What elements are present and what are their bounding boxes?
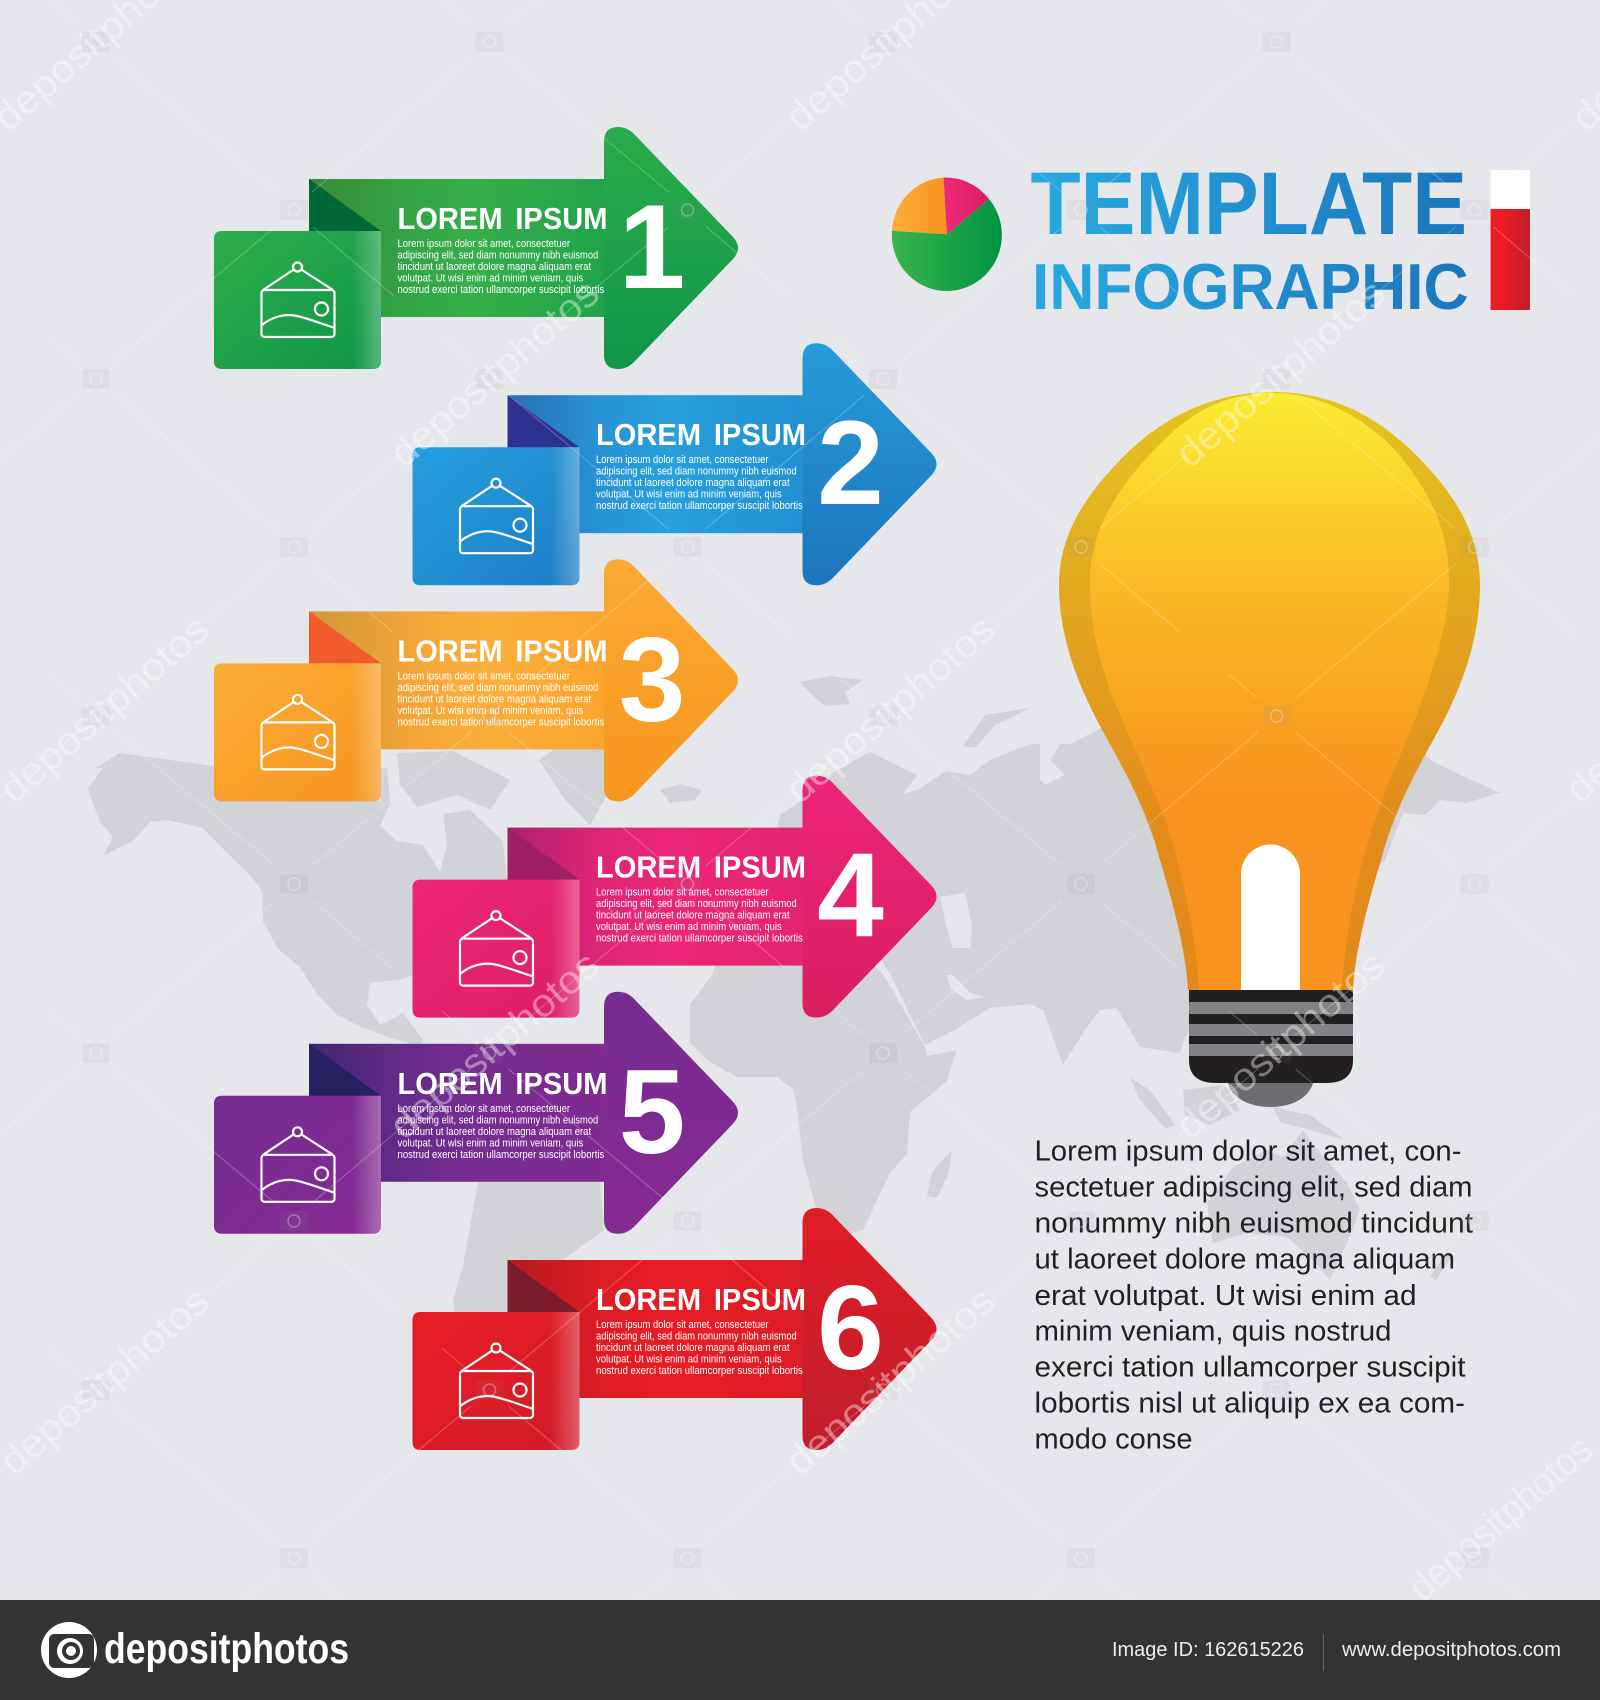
fold [309, 179, 381, 231]
body text: nostrud exerci tation ullamcorper suscipit lobortis [398, 716, 605, 728]
screw cap tip [1227, 1080, 1314, 1107]
fold [508, 1260, 580, 1312]
fold [508, 828, 580, 880]
heading: LOREM IPSUM [596, 850, 806, 885]
icon: hanging picture [262, 1127, 335, 1202]
body text: tincidunt ut laoreet dolore magna aliquam erat [596, 1342, 790, 1354]
icon: hanging picture [460, 911, 534, 986]
body text: adipiscing elit, sed diam nonummy nibh euismod [596, 466, 797, 478]
arrow body [309, 1044, 605, 1182]
map: iceland [660, 784, 702, 803]
arrow head [802, 1208, 936, 1450]
arrow head [802, 776, 936, 1018]
body text [596, 887, 803, 945]
map: arctic islands [397, 751, 510, 810]
arrow head [604, 127, 738, 369]
light bulb [1059, 392, 1480, 1107]
paragraph: minim veniam, quis nostrud [1034, 1316, 1392, 1348]
body text: Lorem ipsum dolor sit amet, consectetuer [596, 1319, 769, 1331]
screw stripes [1189, 1002, 1353, 1056]
number: 5 [619, 1045, 685, 1179]
heading: LOREM IPSUM [398, 201, 608, 236]
body text: Lorem ipsum dolor sit amet, consectetuer [596, 454, 769, 466]
body text [398, 670, 605, 728]
paragraph: sectetuer adipiscing elit, sed diam [1034, 1172, 1472, 1204]
arrow head [604, 559, 738, 801]
paragraph: lobortis nisl ut aliquip ex ea com- [1034, 1388, 1465, 1420]
watermark text: depositphotos [778, 1279, 1004, 1484]
icon: hanging picture [460, 1344, 534, 1418]
paragraph: Lorem ipsum dolor sit amet, con- [1034, 1136, 1462, 1168]
body text: tincidunt ut laoreet dolore magna aliquam erat [398, 1126, 591, 1138]
arrow 4 pink [412, 776, 936, 1018]
fold [309, 611, 381, 663]
arrow head [604, 992, 738, 1234]
body text [596, 1319, 803, 1377]
body text [596, 454, 803, 512]
body text [398, 1103, 605, 1161]
body text: adipiscing elit, sed diam nonummy nibh euismod [596, 1330, 797, 1342]
heading: LOREM IPSUM [398, 1066, 608, 1101]
fold [508, 395, 580, 447]
body text: tincidunt ut laoreet dolore magna aliquam erat [596, 910, 790, 922]
watermark text: depositphotos [382, 943, 608, 1148]
footer bar [0, 1600, 1600, 1700]
heading: LOREM IPSUM [398, 633, 608, 668]
map: novaya zemlya [963, 708, 1030, 748]
paragraph: ut laoreet dolore magna aliquam [1034, 1244, 1455, 1276]
body text: nostrud exerci tation ullamcorper suscipit lobortis [596, 1365, 803, 1377]
title line 1: TEMPLATE [1030, 153, 1467, 253]
image id: Image ID: 162615226 [1112, 1639, 1304, 1661]
title bar: white and red [1490, 170, 1530, 310]
map: eurasia [777, 700, 1507, 1065]
watermark text: depositphotos [778, 607, 1004, 812]
number: 1 [619, 180, 685, 314]
icon square [412, 880, 580, 1018]
footer divider [1323, 1634, 1324, 1671]
body text: Lorem ipsum dolor sit amet, consectetuer [398, 238, 570, 250]
arrow body [309, 611, 605, 749]
icon square [412, 1312, 580, 1450]
body text: volutpat. Ut wisi enim ad minim veniam, quis [398, 272, 584, 284]
heading: LOREM IPSUM [596, 1282, 806, 1317]
bulb inner glass [1090, 393, 1449, 990]
pie chart [892, 178, 1002, 291]
body text: nostrud exerci tation ullamcorper suscipit lobortis [596, 500, 803, 512]
map: south america [453, 1182, 604, 1320]
paragraph: nonummy nibh euismod tincidunt [1034, 1208, 1473, 1240]
watermark text: depositphotos [1168, 943, 1394, 1148]
body text: nostrud exerci tation ullamcorper suscipit lobortis [398, 284, 605, 296]
pie slice: green [892, 199, 1002, 291]
heading: LOREM IPSUM [596, 417, 806, 452]
number: 4 [817, 829, 884, 963]
body text: adipiscing elit, sed diam nonummy nibh euismod [398, 250, 598, 262]
body text: Lorem ipsum dolor sit amet, consectetuer [398, 1103, 570, 1115]
fold [309, 1044, 381, 1096]
pie slice: pink [944, 178, 989, 234]
sea: caspian [940, 893, 972, 948]
map: australia [1207, 1130, 1360, 1280]
icon square [214, 231, 381, 369]
bulb outer glass [1059, 392, 1480, 990]
arrow body [309, 179, 605, 317]
arrow body [508, 1260, 804, 1398]
body text: volutpat. Ut wisi enim ad minim veniam, quis [596, 921, 782, 933]
arrow 6 red [412, 1208, 936, 1450]
body text: Lorem ipsum dolor sit amet, consectetuer [398, 670, 570, 682]
body text: adipiscing elit, sed diam nonummy nibh euismod [398, 682, 598, 694]
body text: volutpat. Ut wisi enim ad minim veniam, quis [398, 705, 584, 717]
map: madagascar [927, 1150, 952, 1198]
map: new zealand [1430, 1250, 1452, 1280]
arrow body [508, 828, 804, 966]
paragraph: exerci tation ullamcorper suscipit [1034, 1352, 1466, 1384]
body text: tincidunt ut laoreet dolore magna aliquam erat [398, 693, 591, 705]
map: svalbard [800, 676, 863, 706]
body text: volutpat. Ut wisi enim ad minim veniam, quis [596, 489, 782, 501]
sea: persian gulf [946, 975, 985, 1000]
body text: tincidunt ut laoreet dolore magna aliquam erat [596, 477, 790, 489]
number: 2 [817, 396, 884, 530]
icon: hanging picture [262, 695, 335, 769]
icon square [412, 447, 580, 585]
watermark text: depositphotos [1168, 271, 1394, 476]
pie slice: orange [892, 178, 947, 234]
icon square [214, 663, 381, 801]
body text: Lorem ipsum dolor sit amet, consectetuer [596, 887, 769, 899]
body text: volutpat. Ut wisi enim ad minim veniam, quis [398, 1137, 584, 1149]
map: greenland [539, 735, 640, 825]
title line 2: INFOGRAPHIC [1032, 250, 1468, 323]
icon: hanging picture [262, 262, 335, 337]
footer logo text: depositphotos [104, 1625, 349, 1673]
world map [88, 676, 1507, 1320]
number: 6 [817, 1261, 884, 1395]
body text: volutpat. Ut wisi enim ad minim veniam, quis [596, 1354, 782, 1366]
map: sumatra and malaysia [1130, 1078, 1175, 1128]
body text: adipiscing elit, sed diam nonummy nibh euismod [596, 898, 797, 910]
arrow 2 blue [412, 343, 936, 585]
map: north america [88, 753, 507, 1046]
arrow 3 orange [214, 559, 738, 801]
arrow head [802, 343, 936, 585]
sea: east siberian fjords [1040, 740, 1065, 785]
number: 3 [619, 612, 685, 746]
body text: tincidunt ut laoreet dolore magna aliquam erat [398, 261, 591, 273]
paragraph: erat volutpat. Ut wisi enim ad [1034, 1280, 1416, 1312]
arrow 5 purple [214, 992, 738, 1234]
title [1030, 153, 1468, 323]
paragraph [1034, 1136, 1473, 1456]
body text [398, 238, 605, 296]
footer logo icon [41, 1622, 97, 1678]
icon square [214, 1096, 381, 1234]
filament [1241, 844, 1300, 990]
screw base [1189, 990, 1353, 1083]
arrow 1 green [214, 127, 738, 369]
map: borneo and sulawesi [1183, 1085, 1240, 1125]
body text: nostrud exerci tation ullamcorper suscipit lobortis [596, 933, 803, 945]
body text: adipiscing elit, sed diam nonummy nibh euismod [398, 1114, 598, 1126]
map: africa [690, 962, 957, 1238]
watermark text: depositphotos [382, 271, 608, 476]
arrow body [508, 395, 804, 533]
body text: nostrud exerci tation ullamcorper suscipit lobortis [398, 1149, 605, 1161]
map seas [940, 740, 1065, 1000]
website: www.depositphotos.com [1341, 1639, 1561, 1661]
paragraph: modo conse [1034, 1424, 1192, 1456]
map: new guinea [1273, 1107, 1345, 1140]
icon: hanging picture [460, 479, 534, 553]
